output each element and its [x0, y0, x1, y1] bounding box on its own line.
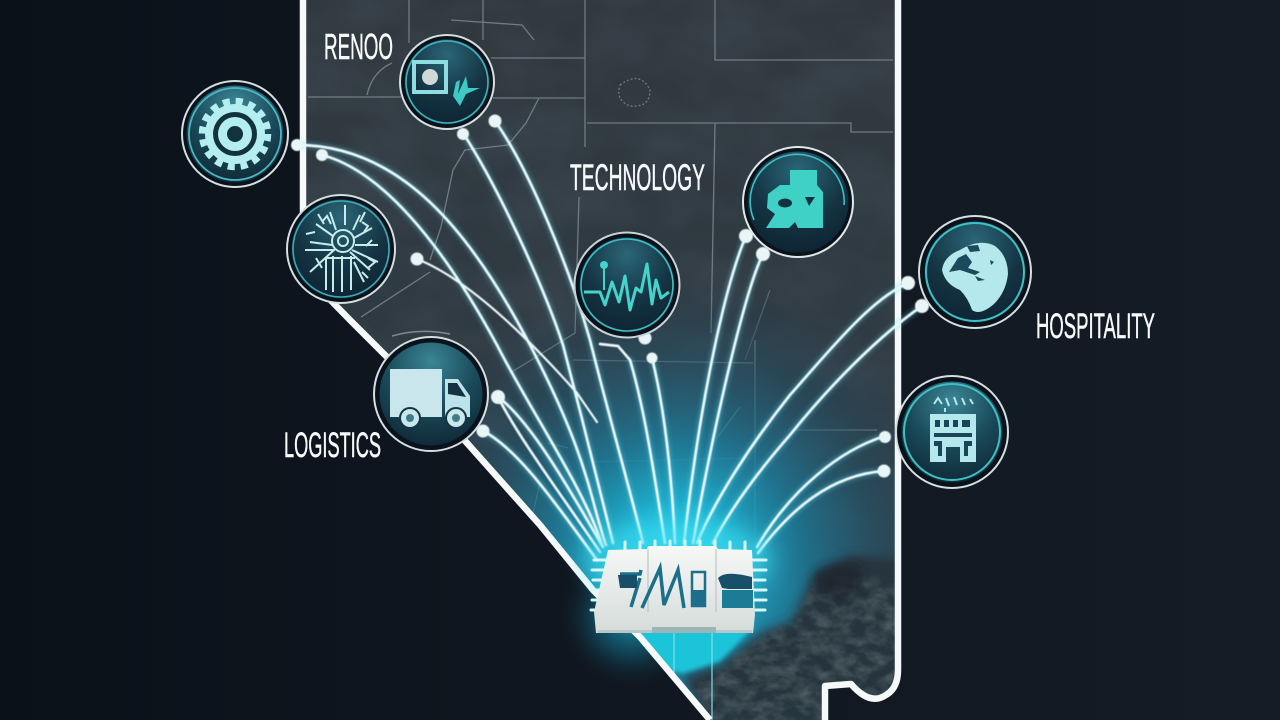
- map: county boundaries: [308, 0, 893, 540]
- chip body: [594, 546, 755, 633]
- icon: gear: [182, 81, 288, 187]
- label: Technology: TECHNOLOGY: [570, 157, 705, 198]
- icon: globe: [919, 216, 1031, 328]
- terrain texture: [695, 578, 895, 720]
- label: Reno: RENOO: [324, 26, 393, 67]
- bright cyan below chip: [625, 625, 755, 673]
- connector glow: [297, 121, 922, 560]
- label: Logistics: LOGISTICS: [284, 426, 381, 465]
- chip glow on map: [468, 298, 894, 720]
- chip pins: [591, 541, 766, 610]
- dark terrain foreground: [683, 555, 905, 720]
- chip graphics: [620, 568, 705, 608]
- connector lines: [297, 121, 922, 560]
- connector end dots: [291, 114, 929, 478]
- icon: teal block symbol: [743, 147, 853, 257]
- map: state shape: [303, 0, 905, 720]
- icon: monitor and signal: [400, 35, 494, 129]
- connector strokes: [297, 121, 922, 560]
- map border: [303, 0, 898, 720]
- icon: building: [896, 376, 1008, 488]
- central chip: [583, 520, 773, 633]
- icon: delivery truck: [374, 331, 488, 451]
- label: Hospitality: HOSPITALITY: [1036, 307, 1155, 346]
- map: mottled surface: [306, 0, 894, 380]
- icon: radiating hub: [287, 195, 395, 303]
- icon: waveform: [574, 232, 680, 338]
